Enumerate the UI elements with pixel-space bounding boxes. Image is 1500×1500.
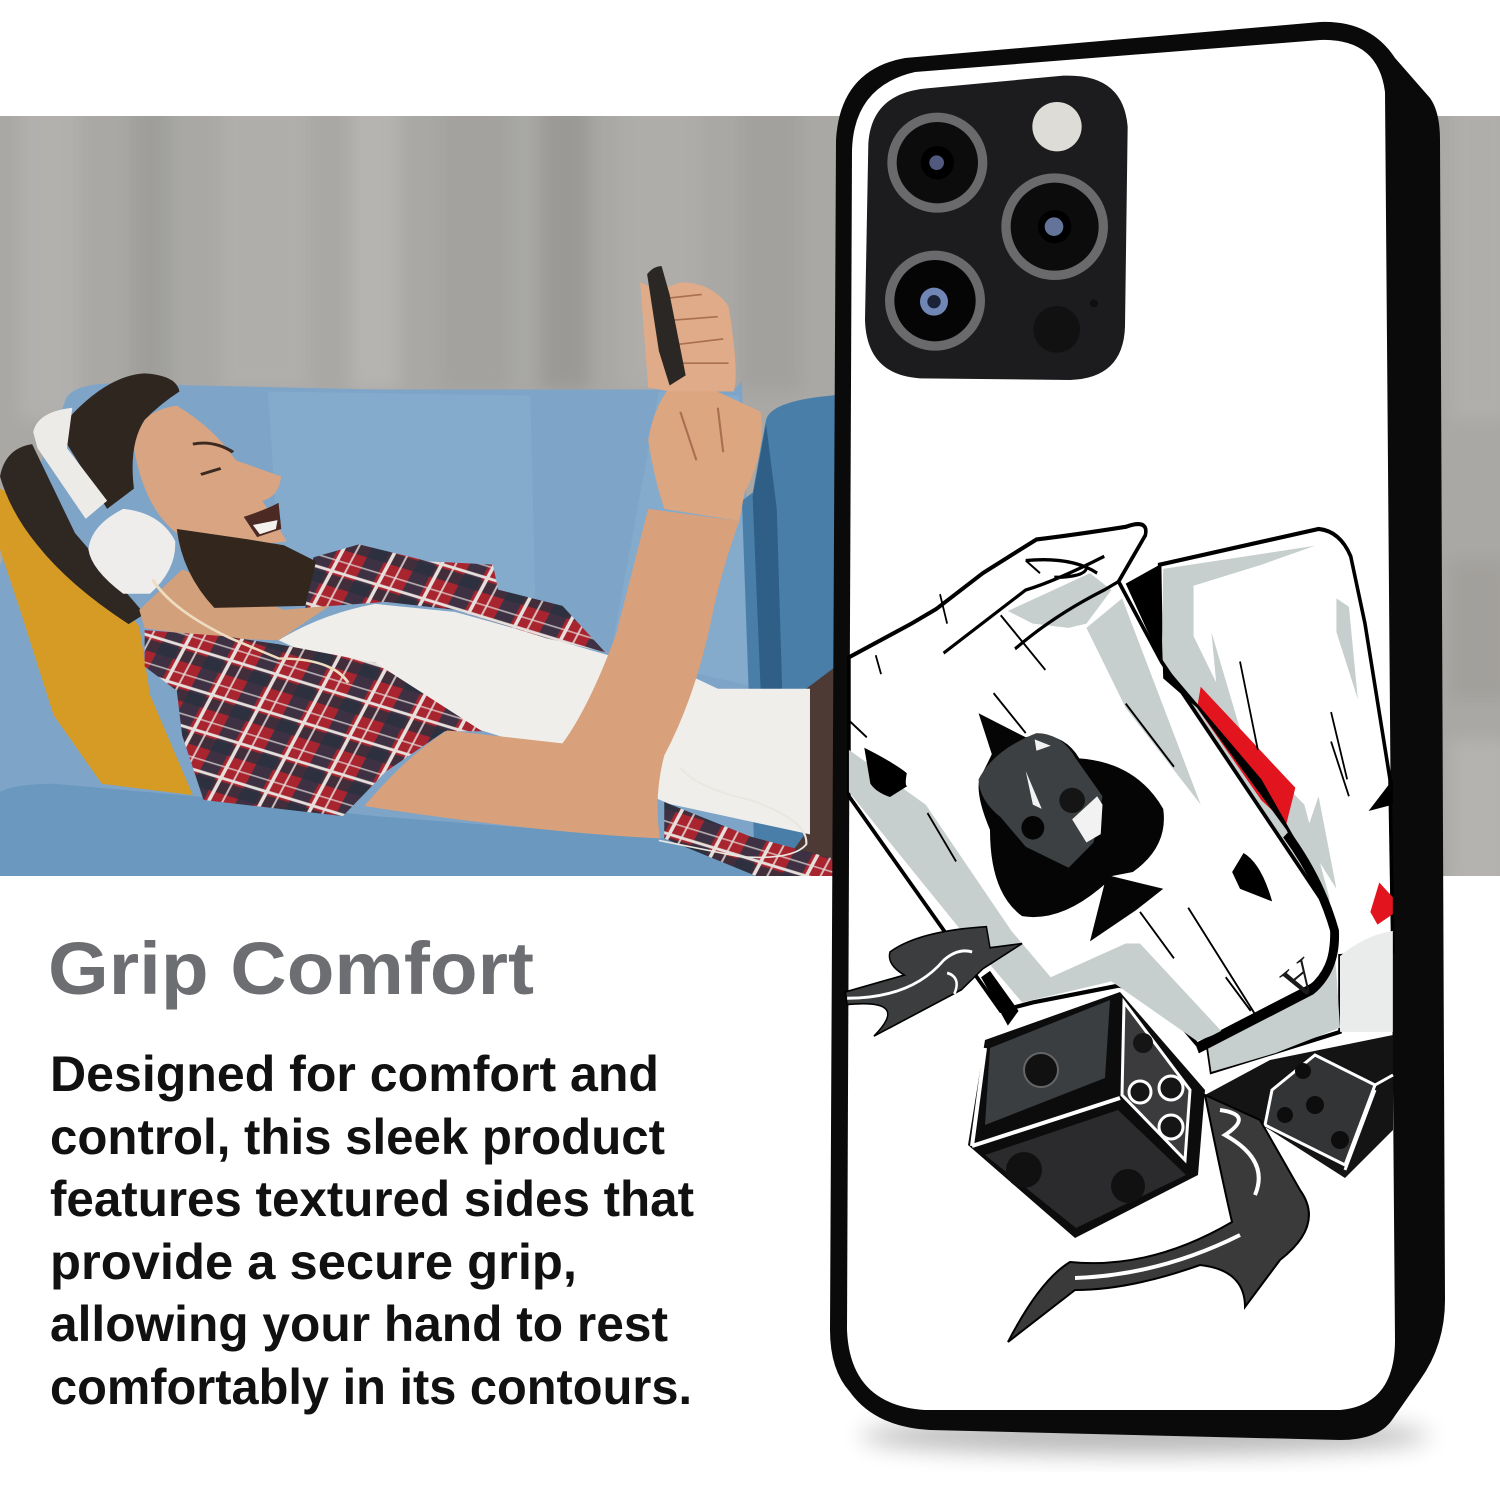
lens right [1001,173,1108,280]
lens top [887,113,987,213]
red suit marks [1197,687,1295,824]
scratches [927,615,1254,1013]
mouth [244,503,281,537]
earphone cable lower [659,768,806,857]
headband [33,408,107,519]
card and dice artwork [845,524,1393,1342]
skull [979,733,1102,868]
case outer black shell [830,22,1445,1440]
sofa and man artwork [0,266,841,880]
die pips [1006,1033,1183,1203]
thick lower-right card edge [1197,834,1335,1049]
body paragraph: allowing your hand to rest [50,1296,668,1352]
sofa back [0,381,761,880]
cable [153,580,348,683]
camera module [865,76,1128,380]
left flame [845,927,1022,1036]
headphones [33,408,348,683]
body paragraph: Designed for comfort and [50,1046,659,1102]
gripping fingers [944,556,1119,653]
finger lines [664,294,729,460]
sofa seat [0,784,771,880]
microphone and sensor [1033,299,1098,353]
eye and brow [193,443,233,474]
shirt plaid body [145,630,482,816]
near hand [648,379,762,521]
hair top [67,373,179,509]
body paragraph: comfortably in its contours. [50,1359,692,1415]
upper shirt plaid [305,544,605,652]
lifestyle photo: man on sofa [0,100,1500,890]
body paragraph: control, this sleek product [50,1109,665,1165]
large die [968,992,1205,1238]
ear cup [88,509,175,594]
hair back [0,444,145,624]
camera island [865,76,1128,380]
card grey shading [849,573,1222,1041]
arm [364,509,739,838]
neck [139,569,329,640]
small spades [864,748,908,797]
phone in hand [647,266,686,385]
jeans [794,668,834,858]
small die pips [1277,1063,1349,1149]
back card [1160,529,1393,1072]
letter A: A [1273,946,1326,1013]
phone case shadow [860,1418,1430,1454]
lower shirt plaid [664,802,841,880]
small die [1205,1035,1393,1178]
beard [177,529,316,608]
lens bottom [885,251,985,351]
face [131,406,287,543]
body paragraph [50,1046,694,1415]
sofa right arm [742,395,835,848]
case white back panel [847,40,1395,1410]
phone case [830,22,1445,1440]
flash [1032,102,1082,151]
body paragraph: features textured sides that [50,1171,694,1227]
heading: Grip Comfort [48,927,534,1010]
lower flame [1008,1095,1309,1342]
far hand [640,282,736,392]
large spade [979,713,1164,941]
concrete wall background [0,100,1500,890]
t-shirt [279,604,810,834]
body paragraph: provide a secure grip, [50,1234,577,1290]
front card [849,524,1335,1049]
pillow [0,489,193,795]
